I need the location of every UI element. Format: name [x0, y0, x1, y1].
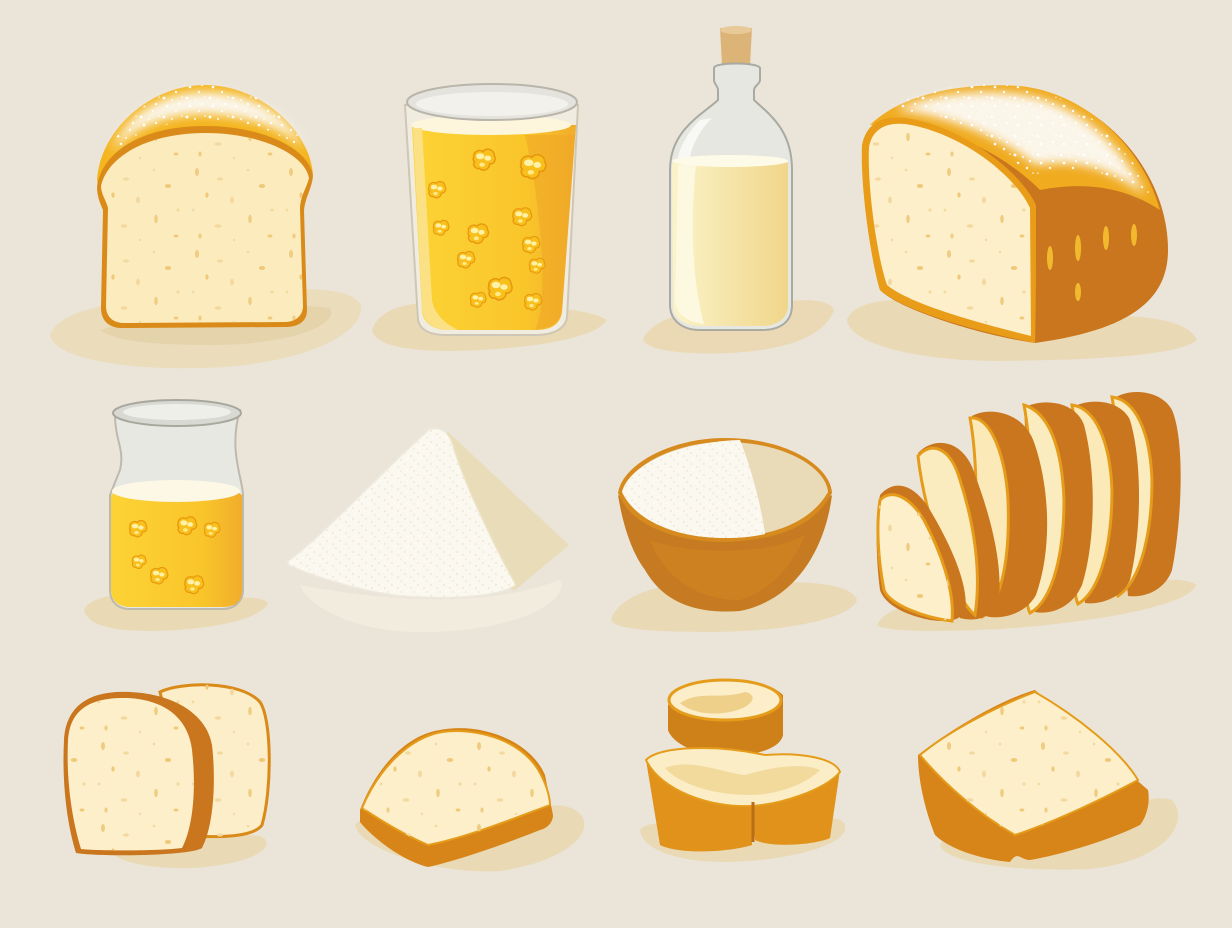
icon: glass of corn juice — [372, 84, 607, 351]
icon: bottle of milk with cork — [643, 26, 834, 353]
icon: flour pile — [287, 430, 569, 632]
icon: large loaf with sugar dusting — [847, 84, 1197, 361]
icon: buttered bread rolls — [640, 680, 845, 862]
icon: small jar of corn juice — [84, 400, 268, 631]
icon: bowl of flour — [611, 438, 857, 632]
icon: bread slice with sugar topping — [50, 85, 361, 368]
icon: tilted bread slice — [355, 728, 584, 871]
icon: two bread slices — [64, 685, 269, 868]
icon: thick bread slice — [918, 690, 1178, 870]
icon: sliced loaf — [877, 392, 1196, 631]
